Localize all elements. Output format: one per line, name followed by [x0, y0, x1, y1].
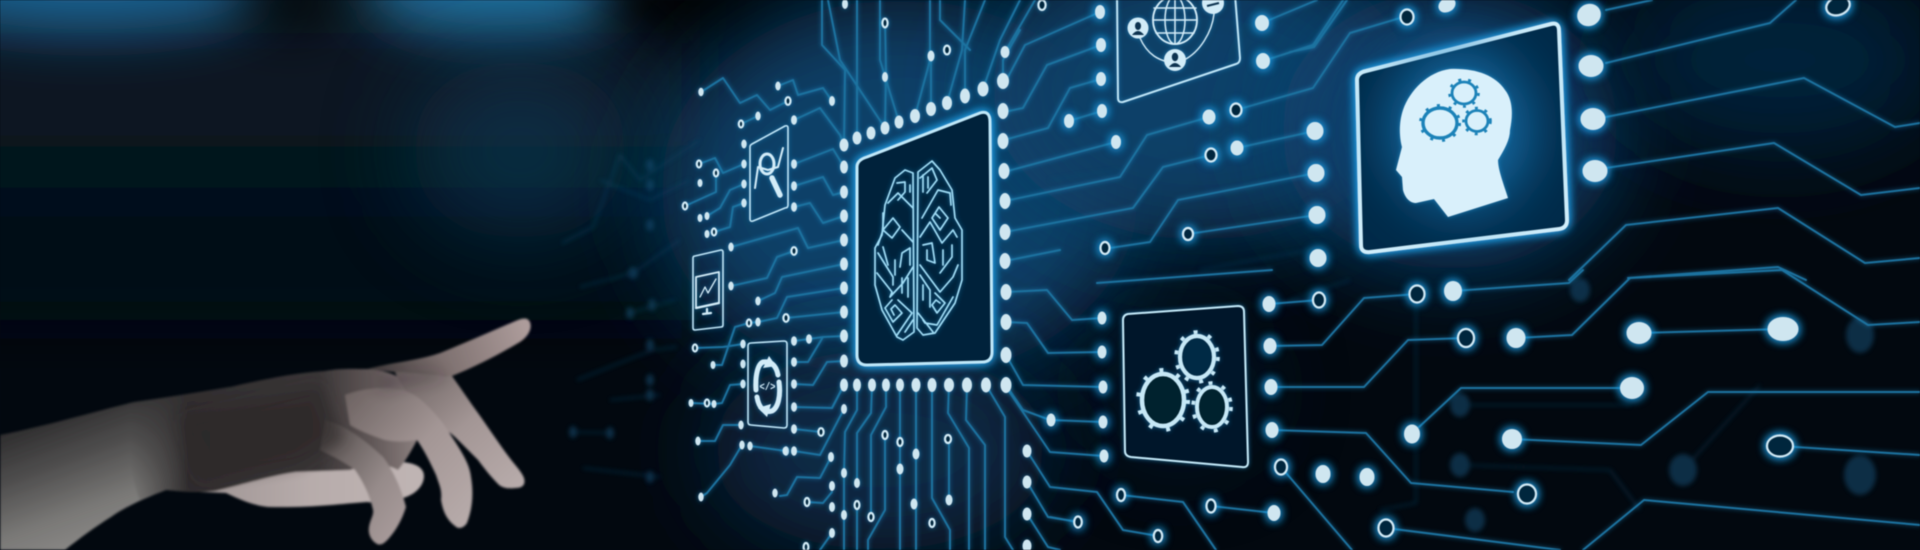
- panel: global network icon: [1117, 0, 1240, 102]
- little finger: [320, 420, 406, 545]
- chip pin dots: [840, 73, 1012, 393]
- forearm: [0, 387, 240, 550]
- small node dots top and bottom centre: [782, 0, 1046, 550]
- thumb: [199, 462, 424, 507]
- middle finger: [395, 372, 525, 488]
- panel: monitor chart icon: [693, 250, 723, 330]
- chip right traces: [1004, 12, 1400, 550]
- panel: head with gears icon: [1357, 24, 1567, 252]
- head box frame: [1357, 24, 1567, 252]
- panel: code refresh icon: [748, 341, 787, 428]
- small node dots left: [683, 82, 835, 502]
- panel: central brain chip: [857, 112, 992, 365]
- panel: analytics search icon: [750, 126, 788, 221]
- icon: monitor with chart: [696, 272, 719, 314]
- palm: [128, 369, 422, 500]
- icon: globe with people: [1128, 0, 1224, 71]
- icon: circuit brain: [875, 161, 962, 340]
- right traces: [1121, 0, 1920, 550]
- chip frame: [857, 112, 992, 365]
- left traces: [685, 78, 844, 497]
- hand pointing at the interface: [0, 319, 531, 550]
- icon: three gears: [1138, 332, 1231, 431]
- right side node dots: [1046, 0, 1852, 542]
- circuit traces: [685, 0, 1920, 550]
- top traces: [822, 0, 1035, 145]
- icon: circular arrows: </>: [760, 382, 776, 394]
- icon: head silhouette with gears: [1396, 69, 1512, 217]
- bottom traces: [780, 385, 1013, 550]
- panel: gears icon: [1123, 306, 1248, 467]
- index finger: [367, 319, 531, 376]
- hand shading: [180, 372, 445, 480]
- icon: magnifier and trend line: [755, 148, 783, 195]
- ring finger: [345, 388, 472, 528]
- blurred background circuit traces: [562, 140, 1876, 532]
